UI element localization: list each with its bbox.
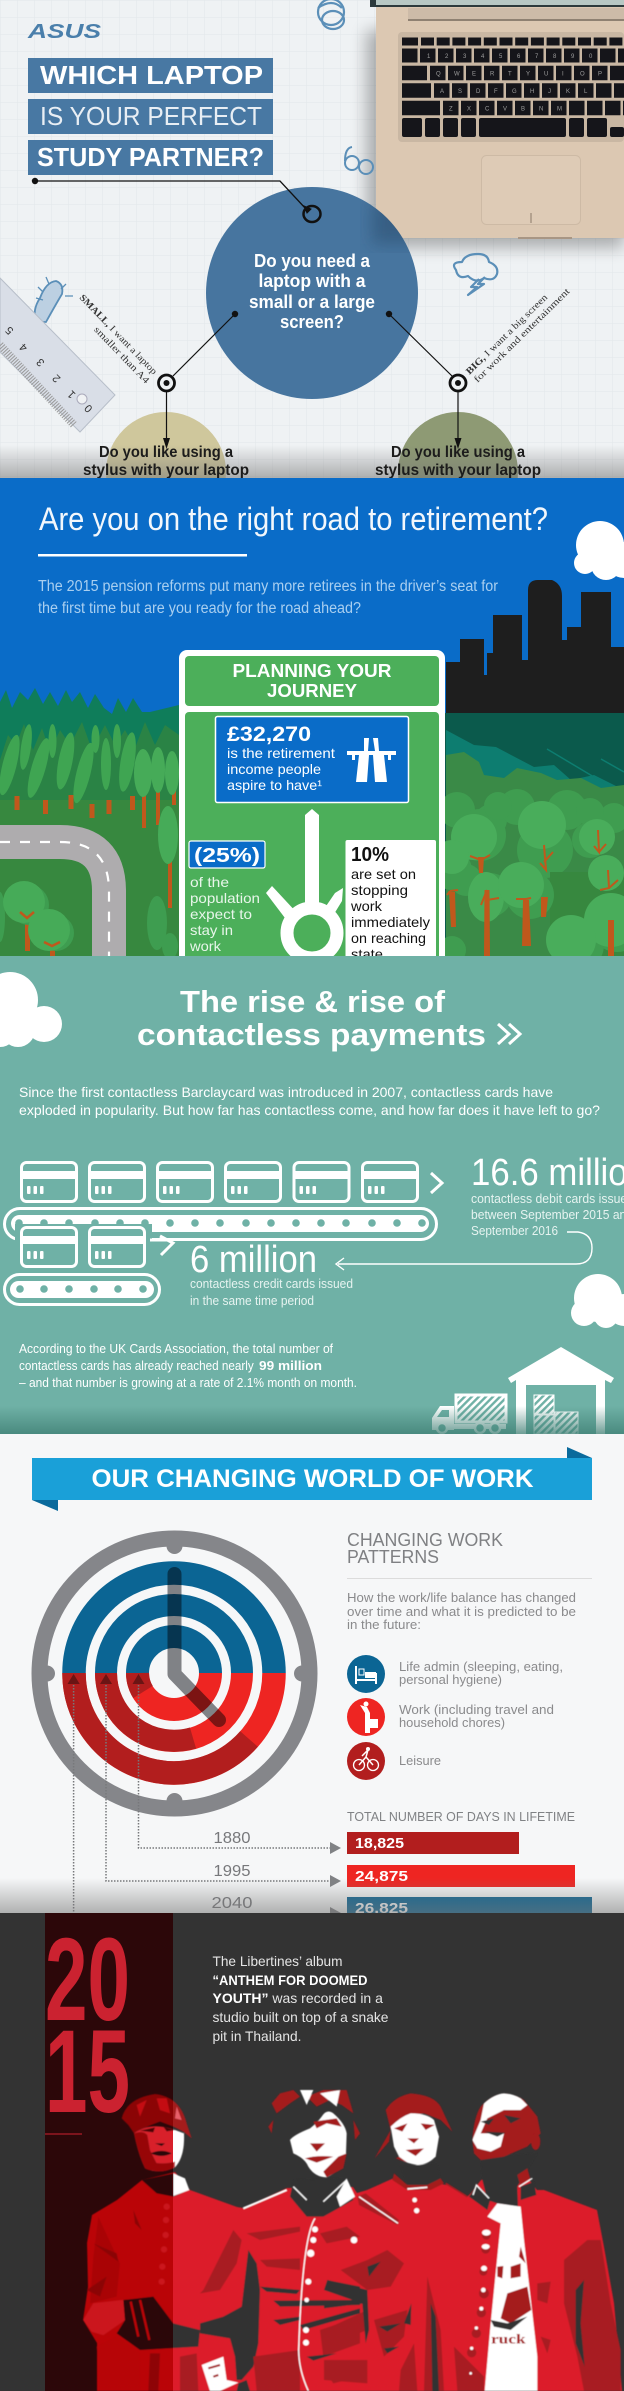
ruler: 0 <box>82 402 95 415</box>
bar chart: days in lifetime: 18,825 <box>355 1835 404 1852</box>
panel: contactless payments <box>0 956 624 1434</box>
laptop: QWERTYUIOP <box>436 72 602 78</box>
stat: 10%: immediately <box>351 914 430 930</box>
doodle: glasses <box>345 147 373 174</box>
doodle: swirl <box>318 0 344 29</box>
stat: 10%: stopping <box>351 882 408 898</box>
album fact <box>212 1953 389 2044</box>
heading: contactless payments <box>137 1017 486 1052</box>
title: IS YOUR PERFECT <box>40 101 262 131</box>
album fact: studio built on top of a snake <box>212 2009 389 2025</box>
doodle: storm cloud <box>454 254 497 295</box>
figure details: right pair: ruck <box>491 2332 526 2347</box>
motorway panel <box>216 716 408 802</box>
title: WHICH LAPTOP <box>40 60 263 90</box>
cloud <box>0 972 62 1047</box>
bar chart: days in lifetime: 24,875 <box>355 1868 408 1885</box>
legend: work <box>347 1698 554 1736</box>
intro text: exploded in popularity. But how far has contactless come, and how far does it have left to go? <box>19 1102 600 1118</box>
markers and dotted leaders <box>68 1674 341 1930</box>
follow-up questions: Do you like using a <box>99 444 233 461</box>
label: big screen <box>465 286 573 385</box>
heading: Are you on the right road to retirement? <box>39 501 548 537</box>
question circle: small or a large <box>249 292 375 312</box>
sign heading: JOURNEY <box>267 681 357 701</box>
bar chart: days in lifetime: 1880 <box>214 1830 251 1847</box>
ruler: 1 <box>65 388 78 401</box>
label: big screen: BIG, I want a big screen <box>465 293 550 377</box>
ruler: 3 <box>34 356 47 369</box>
stat: 10%: work <box>350 898 383 914</box>
panel: 2015 Libertines <box>0 1913 624 2391</box>
ASUS logo: ASUS <box>27 21 102 43</box>
section fade <box>0 445 624 478</box>
section fade <box>0 1406 624 1434</box>
closing text <box>19 1341 357 1390</box>
sub-heading: PATTERNS <box>347 1547 439 1567</box>
illustration: band members <box>83 2090 622 2391</box>
legend: life admin: personal hygiene) <box>399 1672 502 1687</box>
intro text: The 2015 pension reforms put many more retirees in the driver’s seat for <box>38 578 498 595</box>
year: 2015: 15 <box>45 2006 130 2138</box>
closing text: 99 million <box>259 1358 322 1373</box>
laptop: ZXCVBNM <box>449 106 562 112</box>
question circle: Do you need a <box>254 251 371 271</box>
sign heading: PLANNING YOUR <box>232 661 392 681</box>
heading: The rise & rise of <box>180 984 446 1019</box>
album fact: YOUTH” was recorded in a <box>212 1990 383 2006</box>
stat: 25%: work <box>189 938 222 954</box>
bar chart: days in lifetime: 26,825 <box>355 1900 408 1917</box>
stat: 25%: population <box>190 890 260 906</box>
legend: life admin: Life admin (sleeping, eating, <box>399 1659 563 1674</box>
stat: 6 million: 6 million <box>190 1239 317 1281</box>
panel: changing world of work <box>0 1434 624 1930</box>
follow-up questions <box>83 444 541 479</box>
ruler: 5 <box>3 324 16 337</box>
motorway panel: income people <box>227 761 321 777</box>
bar chart: days in lifetime: TOTAL NUMBER OF DAYS IN LIFETIME <box>347 1810 575 1824</box>
stat: 16.6 million: September 2016 <box>471 1223 558 1238</box>
legend: work: Work (including travel and <box>399 1702 554 1717</box>
roundabout icon <box>266 809 343 958</box>
road sign <box>179 650 445 970</box>
motorway panel: aspire to have¹ <box>227 777 322 793</box>
follow-up circles <box>106 412 518 532</box>
stat: 25% <box>189 841 265 954</box>
legend: work: household chores) <box>399 1715 505 1730</box>
stat: 6 million: contactless credit cards issued <box>190 1276 353 1291</box>
figure details: right pair <box>324 2093 621 2391</box>
laptop <box>366 0 624 248</box>
bar chart: days in lifetime <box>212 1810 592 1919</box>
description: in the future: <box>347 1617 421 1632</box>
intro text: Since the first contactless Barclaycard was introduced in 2007, contactless cards have <box>19 1084 553 1100</box>
stat: 6 million <box>190 1239 353 1308</box>
clock chart <box>39 1538 310 1809</box>
ruler: 2 <box>50 372 63 385</box>
ruler: 4 <box>17 341 30 354</box>
cloud <box>571 1274 624 1328</box>
closing text: contactless cards has already reached nearly <box>19 1358 257 1373</box>
figure details: left pair <box>83 2090 360 2391</box>
follow-up questions: stylus with your laptop <box>83 462 249 479</box>
section fade <box>0 1878 624 1913</box>
year: 2015: 20 <box>45 1914 130 2046</box>
album fact: The Libertines’ album <box>212 1953 342 1969</box>
stat: 25%: (25%) <box>194 845 260 867</box>
label: small screen: SMALL, I want a laptop <box>77 293 159 377</box>
album fact: “ANTHEM FOR DOOMED <box>212 1972 368 1988</box>
motorway panel: £32,270 <box>227 723 311 746</box>
bar chart: days in lifetime: 2040 <box>212 1895 253 1912</box>
panel: road to retirement <box>0 478 624 971</box>
description: over time and what it is predicted to be <box>347 1604 576 1619</box>
sub-heading: CHANGING WORK <box>347 1530 503 1550</box>
stat: 6 million: in the same time period <box>190 1293 314 1308</box>
laptop: 1234567890 <box>427 54 593 60</box>
dark colour band <box>45 1913 173 2391</box>
question circle: screen? <box>280 312 344 332</box>
title <box>28 58 273 175</box>
laptop: ASDFGHJKL <box>440 89 588 95</box>
arrow: connector <box>336 1232 592 1270</box>
sub-heading <box>347 1530 503 1567</box>
forest: right <box>432 713 624 971</box>
banner <box>32 1447 592 1511</box>
album fact: pit in Thailand. <box>212 2028 302 2044</box>
legend: leisure <box>347 1742 441 1780</box>
stat: 10% <box>346 840 436 965</box>
stat: 25%: of the <box>190 874 229 890</box>
road <box>0 842 109 956</box>
warehouse and truck <box>432 1347 614 1434</box>
forest: left <box>0 688 179 959</box>
stat: 25%: stay in <box>190 922 233 938</box>
follow-up questions: Do you like using a <box>391 444 525 461</box>
closing text: According to the UK Cards Association, the total number of <box>19 1341 333 1356</box>
panel: which laptop <box>0 0 624 478</box>
intro text <box>38 578 498 617</box>
question circle: laptop with a <box>258 271 366 291</box>
stat: 16.6 million <box>471 1152 624 1238</box>
conveyor: credit cards <box>4 1224 173 1304</box>
description <box>347 1590 576 1632</box>
year: 2015 <box>45 1914 130 2138</box>
legend: life admin <box>347 1655 563 1693</box>
label: big screen: for work and entertainment <box>472 286 573 385</box>
question circle <box>206 187 432 399</box>
conveyor: debit cards <box>4 1162 442 1240</box>
stat: 25%: expect to <box>190 906 252 922</box>
doodle: light bulb <box>35 277 73 322</box>
ruler <box>0 278 115 432</box>
sign heading <box>232 661 392 701</box>
stat: 10%: on reaching <box>351 930 426 946</box>
intro text: the first time but are you ready for the road ahead? <box>38 600 361 617</box>
description: How the work/life balance has changed <box>347 1590 576 1605</box>
cloud <box>574 521 624 580</box>
title: STUDY PARTNER? <box>37 142 264 172</box>
follow-up questions: stylus with your laptop <box>375 462 541 479</box>
intro text <box>19 1084 600 1118</box>
legend: leisure: Leisure <box>399 1753 441 1768</box>
label: small screen: smaller than A4 <box>91 325 151 386</box>
stat: 10%: are set on <box>351 866 416 882</box>
closing text: – and that number is growing at a rate of 2.1% month on month. <box>19 1375 357 1390</box>
stat: 10%: state <box>351 946 383 962</box>
motorway panel: is the retirement <box>227 745 335 761</box>
stat: 10%: 10% <box>351 844 389 866</box>
city skyline <box>446 580 624 715</box>
banner: OUR CHANGING WORLD OF WORK <box>92 1465 534 1493</box>
bar chart: days in lifetime: 1995 <box>214 1863 251 1880</box>
connector lines <box>32 178 466 449</box>
heading <box>137 984 520 1052</box>
